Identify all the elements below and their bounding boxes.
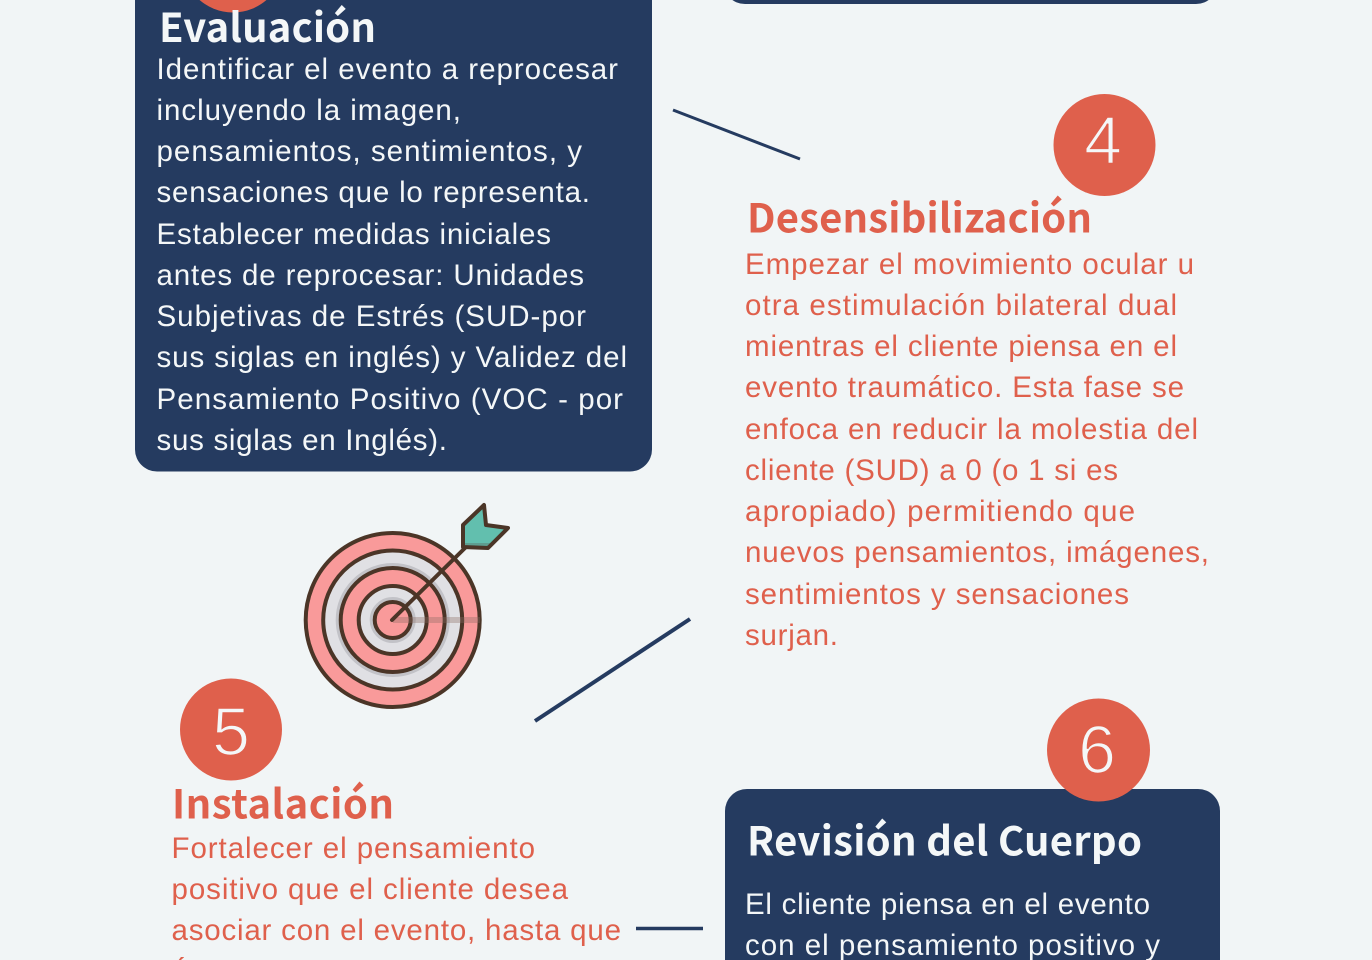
badge: step 6: 6 xyxy=(1078,712,1116,788)
text: Desensibilización body: sentimientos y sensaciones xyxy=(745,578,1129,611)
text: Evaluación body xyxy=(156,53,627,457)
text: Evaluación body: Subjetivas de Estrés (SUD-por xyxy=(156,300,586,333)
text: Evaluación body: incluyendo la imagen, xyxy=(156,94,461,127)
text: Desensibilización body: otra estimulación bilateral dual xyxy=(745,289,1177,322)
text: Evaluación body: Establecer medidas iniciales xyxy=(156,218,551,251)
text: Instalación body: asociar con el evento, hasta que xyxy=(172,914,621,947)
text: Evaluación body: sensaciones que lo representa. xyxy=(156,176,590,209)
badge: step 4: 4 xyxy=(1084,102,1122,178)
text: Instalación body: Fortalecer el pensamiento xyxy=(172,832,535,865)
heading: Revisión del Cuerpo: Revisión del Cuerpo xyxy=(747,810,1142,868)
arrow: connector to step 5 xyxy=(535,619,690,721)
panel: previous step (cropped) xyxy=(723,0,1218,4)
text: Desensibilización body: surjan. xyxy=(745,619,838,652)
text: Desensibilización body xyxy=(745,248,1209,652)
text: Desensibilización body: cliente (SUD) a 0 (o 1 si es xyxy=(745,454,1118,487)
text: Revisión del Cuerpo body xyxy=(745,888,1160,960)
panel: Revisión del Cuerpo xyxy=(725,789,1220,960)
heading: Instalación: Instalación xyxy=(172,772,394,830)
block: Instalación xyxy=(172,772,621,960)
badge: step 5 xyxy=(180,678,282,780)
text: Evaluación body: Pensamiento Positivo (VOC - por xyxy=(156,383,623,416)
panel: Evaluación xyxy=(135,0,652,472)
text: Instalación body: positivo que el cliente desea xyxy=(172,873,569,906)
text: Evaluación body: sus siglas en inglés) y Validez del xyxy=(156,341,627,374)
text: Revisión del Cuerpo body: El cliente piensa en el evento xyxy=(745,888,1150,921)
icon: target with arrow xyxy=(306,505,508,707)
text: Desensibilización body: nuevos pensamientos, imágenes, xyxy=(745,536,1209,569)
badge: step 4 xyxy=(1054,94,1156,196)
text: Desensibilización body: apropiado) permitiendo que xyxy=(745,495,1135,528)
badge: step 5: 5 xyxy=(212,694,250,770)
text: Evaluación body: pensamientos, sentimientos, y xyxy=(156,135,582,168)
heading: Desensibilización: Desensibilización xyxy=(747,186,1092,244)
badge: step 6 xyxy=(1047,698,1150,802)
text: Desensibilización body: evento traumático. Esta fase se xyxy=(745,371,1184,404)
badge: step 3 (cropped) xyxy=(182,0,284,12)
block: Desensibilización xyxy=(745,186,1209,652)
text: Desensibilización body: mientras el cliente piensa en el xyxy=(745,330,1177,363)
text: Evaluación body: antes de reprocesar: Unidades xyxy=(156,259,584,292)
text: Evaluación body: sus siglas en Inglés). xyxy=(156,424,447,457)
text: Evaluación body: Identificar el evento a reprocesar xyxy=(156,53,618,86)
arrow: connector to step 6 xyxy=(636,927,703,930)
arrow: connector to step 4 xyxy=(673,110,800,159)
text: Desensibilización body: enfoca en reducir la molestia del xyxy=(745,413,1198,446)
text: Desensibilización body: Empezar el movimiento ocular u xyxy=(745,248,1194,281)
text: Instalación body xyxy=(172,832,621,960)
